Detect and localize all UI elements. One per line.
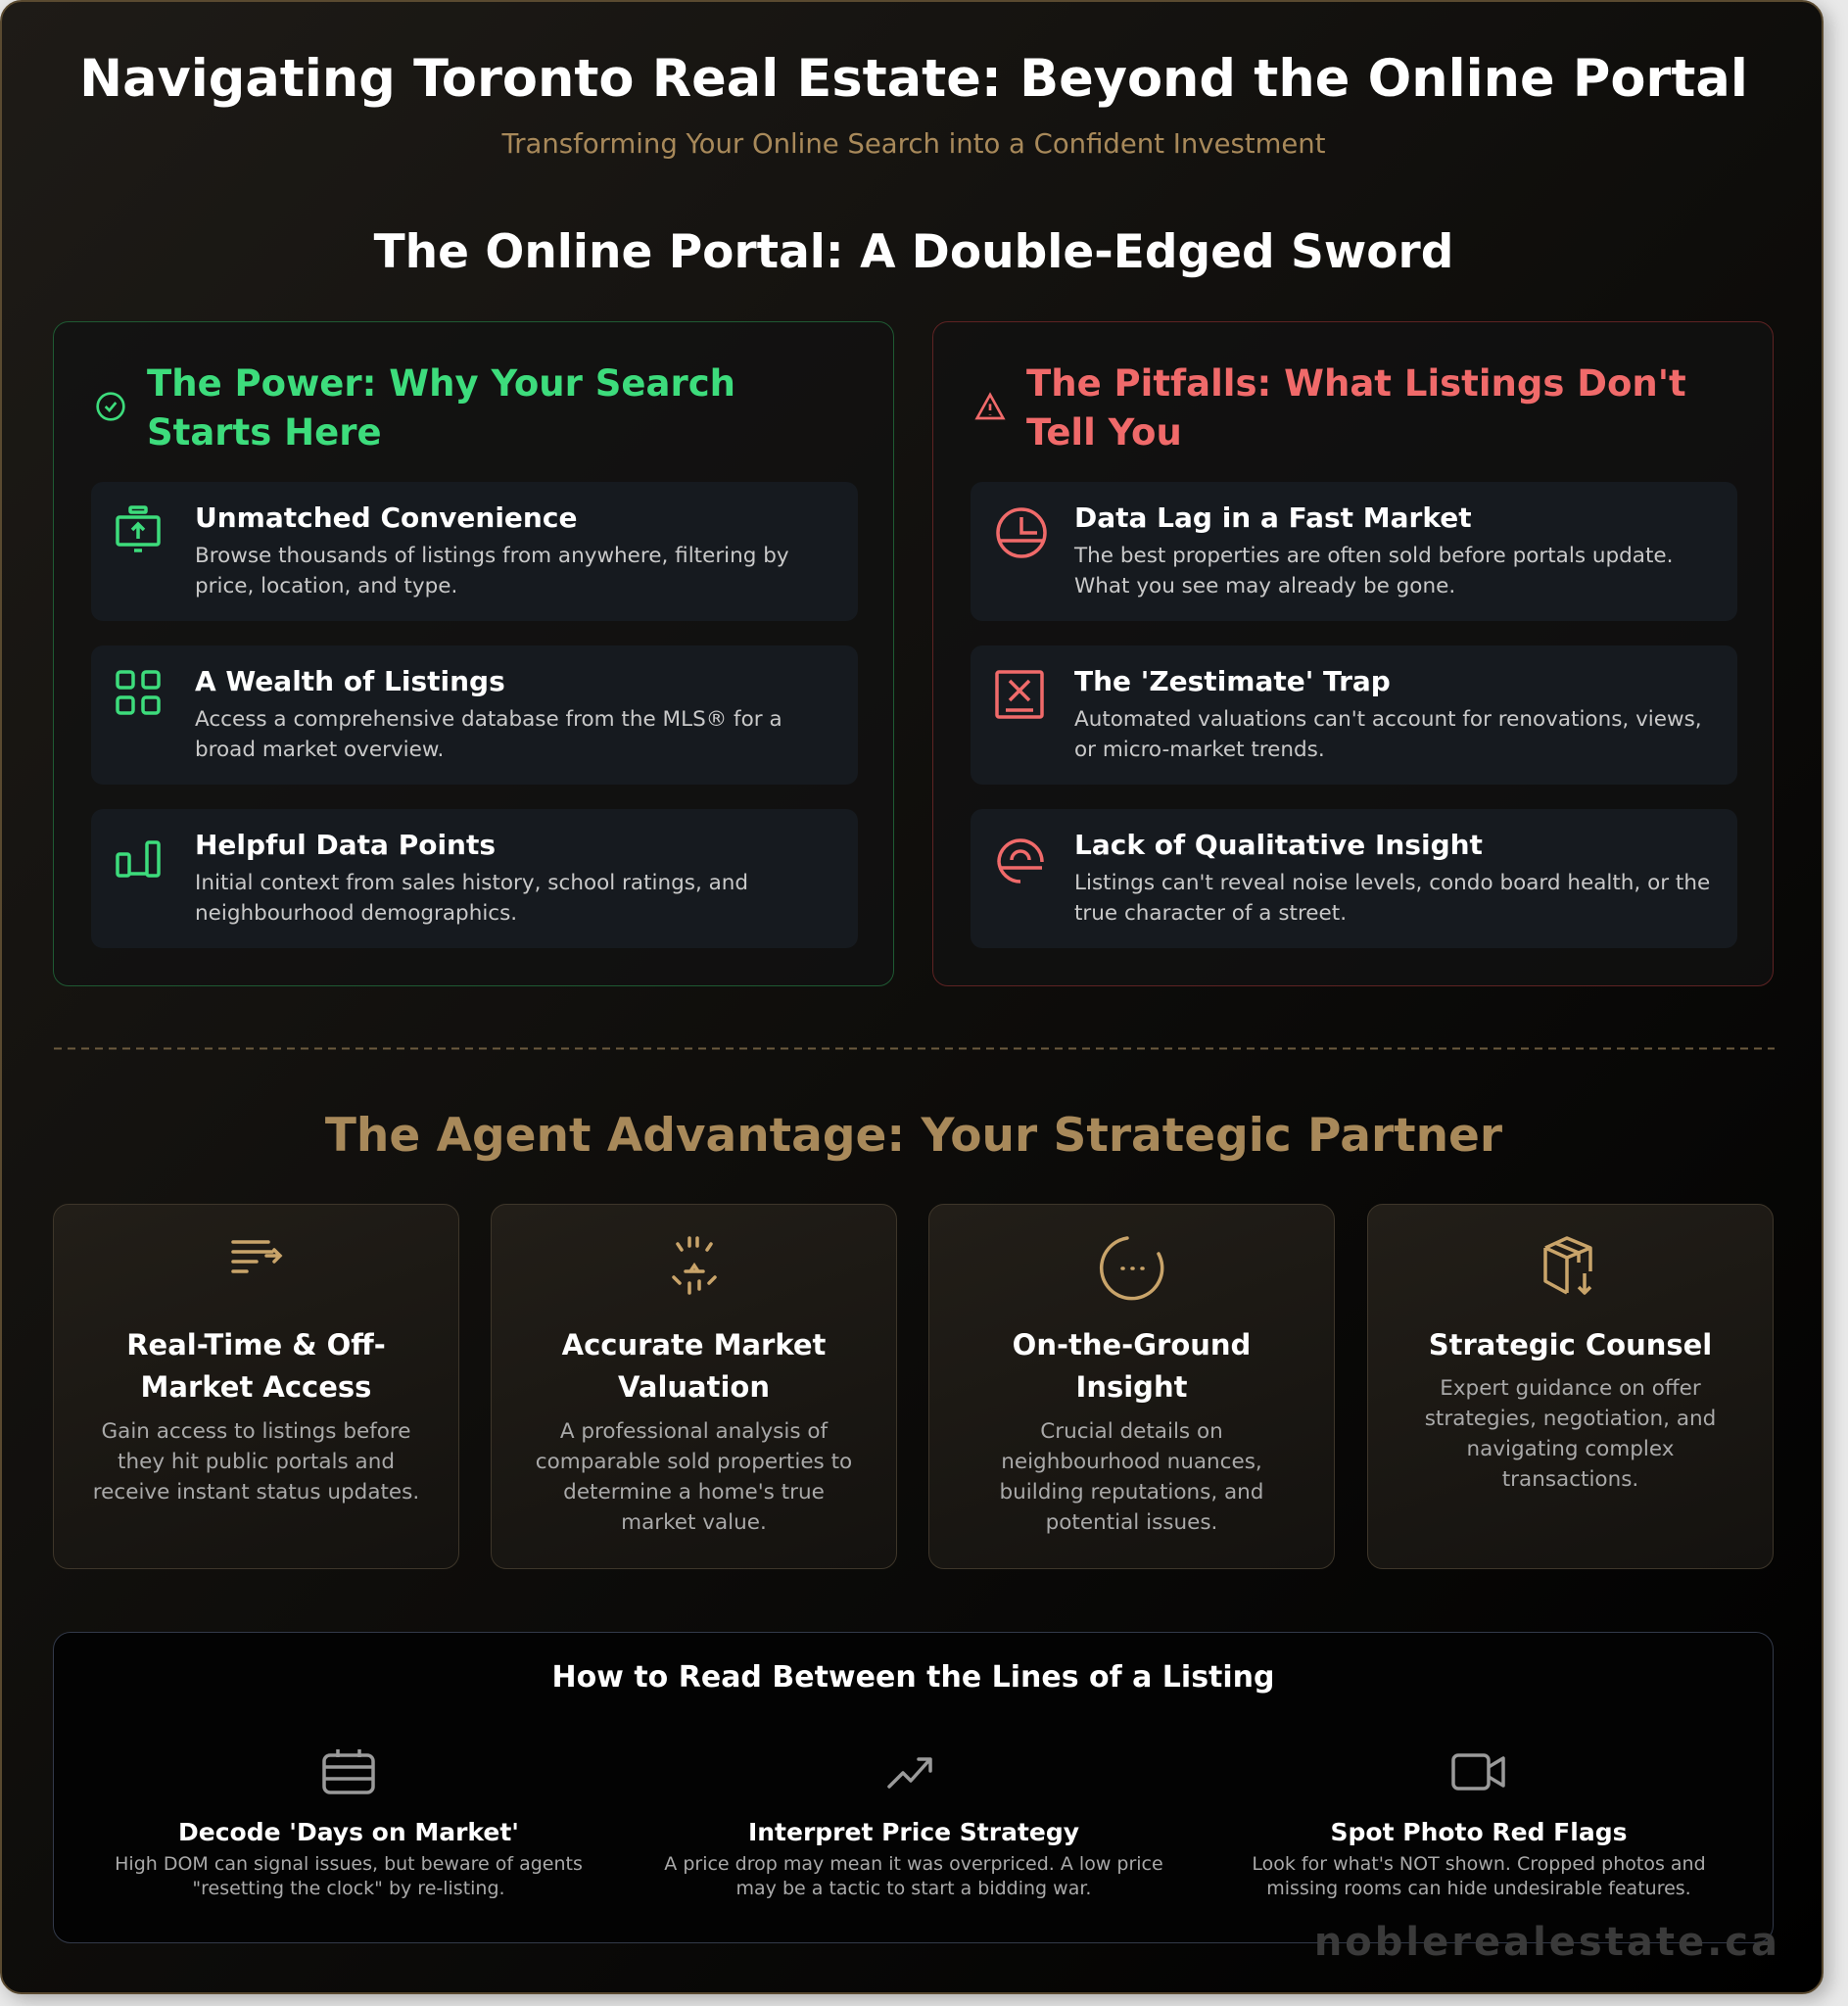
column: price strategy: A price drop may mean it was overpriced. A low price — [664, 1853, 1163, 1875]
icon: trend arrow — [887, 1757, 932, 1789]
icon: grid — [116, 670, 161, 715]
column: days on market: "resetting the clock" by re-listing. — [192, 1878, 505, 1899]
icon: gauge — [997, 838, 1044, 884]
panel heading — [1026, 362, 1686, 454]
agent card: insight: On-the-Ground — [1013, 1328, 1251, 1361]
icon: check circle — [96, 392, 125, 421]
item: zestimate trap: Automated valuations can't account for renovations, views, or micro-market trends. — [1074, 707, 1702, 762]
icon: circle dots — [1099, 1236, 1163, 1301]
agent card: counsel: Expert guidance on offer strategies, negotiation, and navigating complex transactions. — [1425, 1376, 1716, 1492]
column: photo red flags: Look for what's NOT shown. Cropped photos and — [1252, 1853, 1706, 1875]
column: price strategy — [664, 1757, 1163, 1899]
item: qualitative insight: Lack of Qualitative Insight — [1074, 829, 1483, 861]
agent card: valuation: Accurate Market — [562, 1328, 826, 1361]
watermark: noblerealestate.ca — [1314, 1920, 1780, 1965]
title: Navigating Toronto Real Estate: Beyond the Online Portal — [79, 49, 1748, 109]
agent card: real-time: Market Access — [141, 1370, 371, 1404]
column: photo red flags: missing rooms can hide undesirable features. — [1266, 1878, 1691, 1899]
icon: bars — [116, 840, 161, 878]
agent card: valuation: A professional analysis of comparable sold properties to determine a home's true market value. — [536, 1419, 852, 1535]
item: zestimate trap — [971, 645, 1737, 785]
icon: monitor upload — [116, 505, 161, 552]
agent card: insight — [928, 1204, 1335, 1569]
item: convenience: Browse thousands of listings from anywhere, filtering by price, location, and type. — [195, 544, 789, 598]
column: price strategy: Interpret Price Strategy — [748, 1818, 1079, 1846]
agent card: real-time — [53, 1204, 459, 1569]
section heading: agent advantage: The Agent Advantage: Your Strategic Partner — [325, 1109, 1502, 1163]
icon: lines arrow — [231, 1240, 282, 1273]
panel: read between the lines — [53, 1632, 1774, 1943]
panel heading: The Power: Why Your Search — [147, 362, 735, 405]
column: price strategy: may be a tactic to start a bidding war. — [736, 1878, 1091, 1899]
item: qualitative insight: Listings can't reveal noise levels, condo board health, or the true character of a street. — [1074, 871, 1710, 926]
subtitle: Transforming Your Online Search into a Confident Investment — [501, 128, 1326, 160]
item: wealth of listings — [91, 645, 858, 785]
agent card: real-time: Real-Time & Off- — [126, 1328, 386, 1361]
agent card: valuation: Valuation — [618, 1370, 770, 1404]
column: photo red flags: Spot Photo Red Flags — [1331, 1818, 1627, 1846]
item: qualitative insight — [971, 809, 1737, 948]
item: data points — [91, 809, 858, 948]
icon: calendar — [322, 1749, 375, 1794]
panel heading — [147, 362, 735, 454]
item: data lag: Data Lag in a Fast Market — [1074, 502, 1472, 534]
column: days on market — [115, 1749, 583, 1899]
icon: box arrow — [1543, 1236, 1592, 1295]
icon: video camera — [1451, 1753, 1505, 1791]
column: photo red flags — [1252, 1753, 1706, 1899]
item: data points: Initial context from sales history, school ratings, and neighbourhood demographics. — [195, 871, 748, 926]
agent card: real-time: Gain access to listings before they hit public portals and receive instant status updates. — [93, 1419, 419, 1504]
section heading: online portal: The Online Portal: A Double-Edged Sword — [374, 225, 1453, 279]
item: wealth of listings: Access a comprehensive database from the MLS® for a broad market overview. — [195, 707, 782, 762]
item: data lag — [971, 482, 1737, 621]
item: data lag: The best properties are often sold before portals update. What you see may already be gone. — [1074, 544, 1673, 598]
agent card: valuation — [491, 1204, 897, 1569]
agent card: insight: Crucial details on neighbourhood nuances, building reputations, and potential issues. — [1000, 1419, 1263, 1535]
heading: How to Read Between the Lines of a Listing — [551, 1660, 1275, 1695]
agent card: counsel: Strategic Counsel — [1429, 1328, 1712, 1361]
agent card: counsel — [1367, 1204, 1774, 1569]
column: days on market: Decode 'Days on Market' — [178, 1818, 519, 1846]
column: days on market: High DOM can signal issues, but beware of agents — [115, 1853, 583, 1875]
item: convenience — [91, 482, 858, 621]
item: zestimate trap: The 'Zestimate' Trap — [1074, 665, 1391, 697]
icon: sparkle scale — [672, 1236, 717, 1295]
icon: x box — [995, 670, 1044, 719]
icon: warning triangle — [975, 392, 1005, 419]
item: wealth of listings: A Wealth of Listings — [195, 665, 505, 697]
agent card: insight: Insight — [1076, 1370, 1187, 1404]
panel heading: Starts Here — [147, 411, 382, 454]
panel: the pitfalls — [932, 321, 1774, 986]
panel heading: The Pitfalls: What Listings Don't — [1026, 362, 1686, 405]
item: data points: Helpful Data Points — [195, 829, 496, 861]
item: convenience: Unmatched Convenience — [195, 502, 577, 534]
icon: clock — [996, 507, 1047, 558]
panel heading: Tell You — [1026, 411, 1182, 454]
panel: the power — [53, 321, 894, 986]
